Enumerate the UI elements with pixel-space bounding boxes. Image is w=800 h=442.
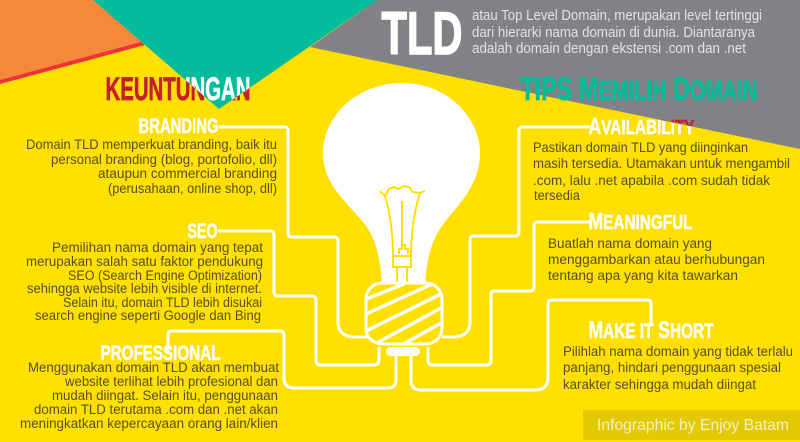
text block: seo: sehingga website lebih visible di internet. (27, 281, 262, 296)
panel: seo (26, 220, 263, 323)
credit bar (583, 410, 800, 440)
gray banner (310, 0, 800, 149)
text block: branding: ataupun commercial branding (98, 166, 277, 181)
text block: branding: (perusahaan, online shop, dll) (108, 181, 277, 196)
text block: make it short: karakter sehingga mudah diingat (563, 377, 756, 392)
wire: make it short (411, 300, 651, 390)
text block: seo: Pemilihan nama domain yang tepat (52, 240, 263, 255)
orange corner (0, 0, 143, 81)
text block: meaningful (548, 236, 765, 283)
panel: meaningful (548, 208, 765, 283)
text block: branding: Domain TLD memperkuat branding, baik itu (26, 137, 277, 152)
text block: availability: masih tersedia. Utamakan untuk mengambil (533, 156, 790, 171)
heading: availability: AVAILABILITY (588, 113, 695, 139)
text block: availability: .com, lalu .net apabila .com sudah tidak (533, 173, 770, 188)
text block: professional: Menggunakan domain TLD akan membuat (28, 360, 279, 375)
text block: meaningful: menggambarkan atau berhubungan (548, 252, 765, 267)
text block: TLD description: adalah domain dengan ekstensi .com dan .net (472, 41, 746, 57)
heading: professional: PROFESSIONAL (100, 342, 221, 365)
wire: seo (218, 231, 379, 365)
text block: seo: search engine seperti Google dan Bing (35, 308, 261, 323)
text block: branding (26, 137, 277, 196)
heading: keuntungan: KEUNTUNGAN (106, 71, 250, 107)
heading: make it short: MAKE IT SHORT (588, 317, 714, 344)
text block: TLD description: atau Top Level Domain, merupakan level tertinggi (472, 8, 762, 24)
red stripe (0, 42, 145, 84)
wire: branding (219, 127, 367, 337)
wire: meaningful (428, 222, 590, 365)
text block: TLD description (472, 8, 762, 57)
text block: professional: website terlihat lebih profesional dan (64, 374, 278, 389)
panel: availability (533, 113, 790, 203)
text block: TLD description: dari hierarki nama domain di dunia. Diantaranya (472, 25, 756, 41)
wire: availability (442, 127, 590, 337)
text block: branding: personal branding (blog, portofolio, dll) (51, 152, 277, 167)
credit bar: Infographic by Enjoy Batam (597, 417, 789, 434)
panel: make it short (563, 317, 793, 392)
icon: light bulb (323, 83, 480, 356)
text block: professional: meningkatkan kepercayaan orang lain/klien (20, 416, 278, 431)
text block: seo: merupakan salah satu faktor pendukung (26, 254, 263, 269)
text block: make it short: Pilihlah nama domain yang tidak terlalu (563, 344, 793, 359)
heading: meaningful: MEANINGFUL (588, 208, 692, 234)
text block: availability (533, 140, 790, 203)
heading: branding: BRANDING (138, 115, 218, 138)
text block: meaningful: tentang apa yang kita tawarkan (548, 268, 738, 283)
text block: seo (26, 240, 263, 323)
text block: professional: domain TLD terutama .com dan .net akan (34, 402, 278, 417)
text block: availability: Pastikan domain TLD yang diinginkan (533, 140, 748, 155)
text block: professional: mudah diingat. Selain itu, penggunaan (52, 388, 278, 403)
text block: meaningful: Buatlah nama domain yang (548, 236, 712, 251)
text block: availability: tersedia (534, 188, 580, 203)
teal triangle (93, 0, 377, 109)
panel: branding (26, 115, 277, 196)
heading: seo: SEO (188, 220, 218, 243)
heading: tips memilih domain: TIPS MEMILIH DOMAIN (520, 71, 758, 107)
panel: professional (20, 342, 279, 431)
text block: seo: SEO (Search Engine Optimization) (68, 268, 262, 283)
title: TLD: TLD (382, 0, 462, 67)
wire: professional (168, 331, 396, 388)
text block: seo: Selain itu, domain TLD lebih disukai (63, 295, 262, 310)
text block: make it short: panjang, hindari penggunaan spesial (563, 360, 781, 375)
text block: professional (20, 360, 279, 431)
text block: make it short (563, 344, 793, 392)
